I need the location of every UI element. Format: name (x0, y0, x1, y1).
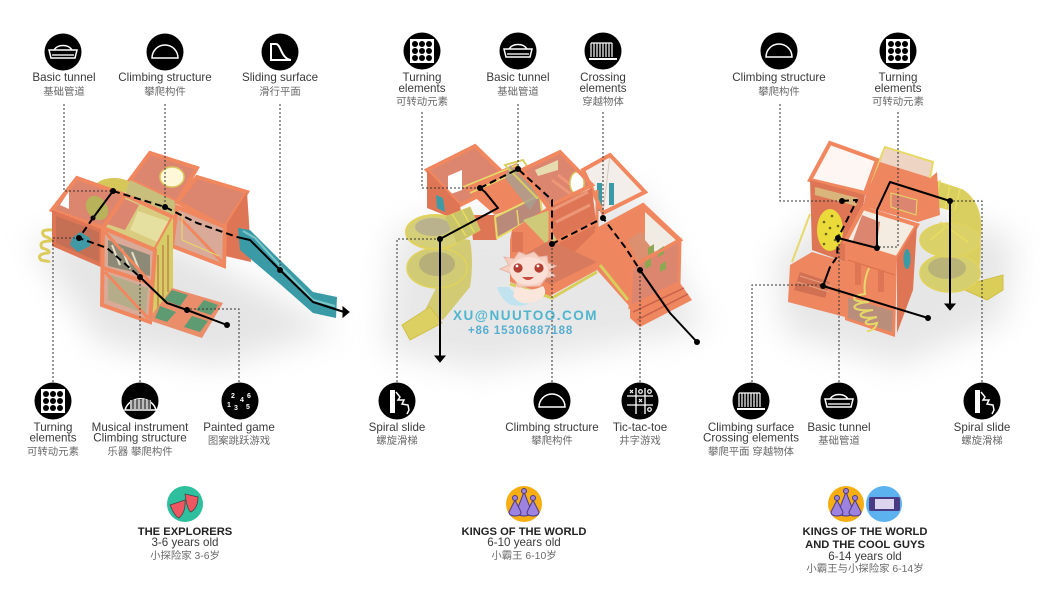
callout: climbing surface: Climbing surface (708, 421, 794, 434)
callout: climbing surface (703, 382, 799, 458)
illustration: teal slide (238, 228, 337, 318)
age group: kings and cool guys: KINGS OF THE WORLD (803, 526, 927, 538)
panel: the explorers play structure (30, 104, 349, 382)
illustration: yellow spiral slide (920, 180, 1003, 300)
age group: kings and cool guys: 6-14 years old (828, 550, 902, 563)
callout: painted game: 3 (234, 405, 238, 412)
watermark mascot (497, 252, 556, 306)
callout: spiral slide 2: Spiral slide (954, 421, 1010, 434)
age group: kings of the world: KINGS OF THE WORLD (462, 526, 586, 538)
callout: climbing structure 2: 攀爬构件 (531, 434, 573, 447)
callout: turning elements 3 (872, 32, 924, 108)
callout: turning elements 2: 可转动元素 (396, 95, 448, 108)
floor shadow (30, 230, 340, 365)
callout: climbing structure: 攀爬构件 (144, 85, 186, 98)
callout: tic-tac-toe (613, 382, 667, 447)
callout: painted game: 6 (247, 393, 251, 400)
callout: basic tunnel 2 (486, 32, 550, 98)
callout: sliding surface: Sliding surface (242, 71, 318, 84)
callout: spiral slide (369, 382, 425, 447)
callout: basic tunnel 3: Basic tunnel (807, 421, 871, 434)
age group: kings and cool guys: AND THE COOL GUYS (805, 539, 925, 551)
callout: spiral slide: 螺旋滑梯 (376, 434, 418, 447)
age group: kings and cool guys (803, 486, 927, 575)
callout: basic tunnel 3: 基础管道 (818, 434, 860, 447)
callout: climbing structure 3 (732, 32, 826, 98)
callout: musical instrument: Musical instrument (92, 421, 189, 434)
age group: the explorers: 3-6 years old (151, 536, 219, 549)
callout: turning elements 2: Turning (403, 71, 441, 84)
panel: kings and cool guys play structure (752, 104, 1015, 382)
callout: turning elements 2 (396, 32, 448, 108)
callout: crossing elements: Crossing (580, 71, 626, 84)
callout lines: kings and cool guys (752, 104, 982, 382)
callout: painted game: 5 (246, 404, 250, 411)
watermark text: +86 15306887188 (468, 325, 573, 337)
age group: the explorers: THE EXPLORERS (138, 526, 233, 538)
callout: turning elements 3: 可转动元素 (872, 95, 924, 108)
callout: spiral slide 2: 螺旋滑梯 (961, 434, 1003, 447)
floor shadow (775, 180, 1015, 365)
illustration: cool guys building (788, 143, 940, 337)
callout: tic-tac-toe: Tic-tac-toe (613, 421, 667, 434)
callout: tic-tac-toe: 井字游戏 (619, 434, 661, 447)
callout: climbing structure 2 (505, 382, 599, 447)
age group: kings and cool guys: 小霸王与小探险家 6-14岁 (806, 562, 924, 575)
callout: turning elements 2: elements (398, 82, 446, 95)
age group: kings of the world (462, 486, 586, 562)
callout: basic tunnel 3 (807, 382, 871, 447)
callout: turning elements: Turning (34, 421, 72, 434)
callout: turning elements: elements (29, 432, 77, 444)
floor shadow (385, 190, 705, 370)
callout: climbing structure 3: Climbing structure (732, 71, 826, 84)
callout: painted game: 4 (240, 397, 244, 404)
icon: kings (828, 486, 864, 522)
callout lines: explorers (53, 104, 280, 382)
age group: the explorers: 小探险家 3-6岁 (150, 549, 220, 562)
callout: turning elements 3: elements (874, 82, 922, 95)
callout lines: kings (397, 104, 640, 382)
callout: musical instrument: Climbing structure (93, 432, 187, 444)
callout: climbing structure (118, 34, 212, 98)
callout: crossing elements: elements (579, 82, 627, 95)
callout: climbing surface: 攀爬平面 穿越物体 (708, 445, 795, 458)
age group: kings of the world: 小霸王 6-10岁 (491, 549, 557, 562)
callout: basic tunnel 2: 基础管道 (497, 85, 539, 98)
callout: painted game (203, 382, 275, 447)
illustration: explorers building (40, 153, 251, 338)
callout: crossing elements: 穿越物体 (582, 95, 624, 108)
callout: basic tunnel: 基础管道 (43, 85, 85, 98)
callout: climbing structure 3: 攀爬构件 (758, 85, 800, 98)
callout: turning elements 3: Turning (879, 71, 917, 84)
callout: crossing elements (579, 32, 627, 108)
age group: kings of the world: 6-10 years old (487, 536, 561, 549)
callout: musical instrument (92, 382, 189, 458)
callout: painted game: Painted game (203, 421, 275, 434)
callout: painted game: 图案跳跃游戏 (208, 434, 270, 447)
callout: climbing structure 2: Climbing structure (505, 421, 599, 434)
icon: footprints (167, 486, 203, 522)
age group: the explorers (138, 486, 233, 562)
route path: explorers (76, 188, 349, 328)
callout: painted game: 2 (231, 393, 235, 400)
callout: spiral slide 2 (954, 382, 1010, 447)
callout: spiral slide: Spiral slide (369, 421, 425, 434)
illustration: yellow spiral slide (402, 207, 480, 340)
callout: basic tunnel: Basic tunnel (32, 71, 96, 84)
callout: musical instrument: 乐器 攀爬构件 (107, 445, 173, 458)
illustration: kings building (427, 146, 692, 327)
callout: basic tunnel (32, 34, 96, 98)
watermark text (453, 308, 598, 337)
callout: climbing surface: Crossing elements (703, 432, 799, 444)
route path: kings (435, 166, 700, 362)
callout: climbing structure: Climbing structure (118, 71, 212, 84)
callout: sliding surface (242, 34, 318, 98)
icon: game console (866, 486, 902, 522)
watermark text: XU@NUUTOO.COM (453, 308, 598, 323)
callout: painted game: 1 (227, 402, 231, 409)
route path: kings and cool guys (820, 182, 955, 321)
panel: kings of the world play structure (385, 104, 705, 382)
callout: sliding surface: 滑行平面 (259, 85, 301, 98)
callout: turning elements: 可转动元素 (27, 445, 79, 458)
callout: turning elements (27, 382, 79, 458)
callout: basic tunnel 2: Basic tunnel (486, 71, 550, 84)
icon: kings (506, 486, 542, 522)
